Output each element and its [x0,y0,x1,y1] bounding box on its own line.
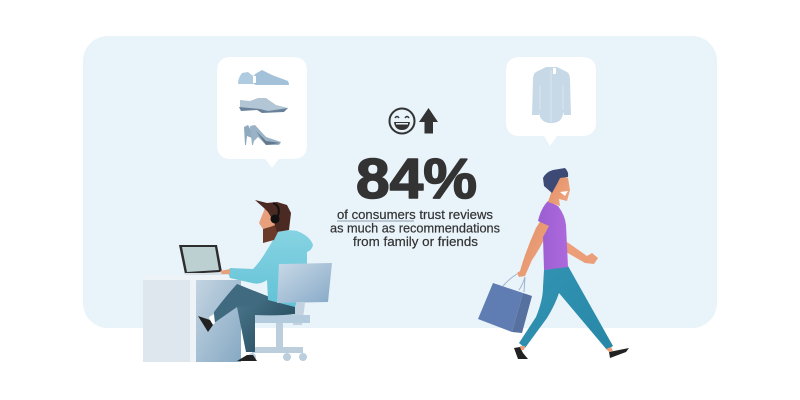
icon: high heels [244,125,281,145]
hoodie [220,230,313,307]
headline stat: 84% [356,147,477,211]
illustration: walking man with bag [478,168,629,359]
icon: shirt [532,67,571,123]
head [255,200,291,243]
description text: from family or friends [353,234,479,249]
head [543,168,570,206]
laptop [179,245,229,275]
speech bubble: shoes [217,57,307,168]
icon: dress shoes [239,98,288,113]
icon: up arrow [419,108,438,134]
illustration: man at desk [143,200,332,362]
chair back [277,263,332,303]
shoes [514,346,629,359]
legs [198,284,295,361]
chair [246,303,310,361]
description text: of consumers trust reviews [337,207,493,222]
description text [330,207,500,249]
icon: laughing face [390,108,414,134]
description text: as much as recommendations [330,220,500,236]
underline: of consumers [337,220,414,222]
speech bubble: shirt [506,57,596,146]
shopping bag [478,274,532,333]
back arm [517,220,550,277]
icon: sneakers [238,70,289,85]
t-shirt [538,201,568,270]
desk [143,275,241,362]
front arm [566,242,598,264]
panel: background [83,36,717,328]
trousers [519,266,613,350]
